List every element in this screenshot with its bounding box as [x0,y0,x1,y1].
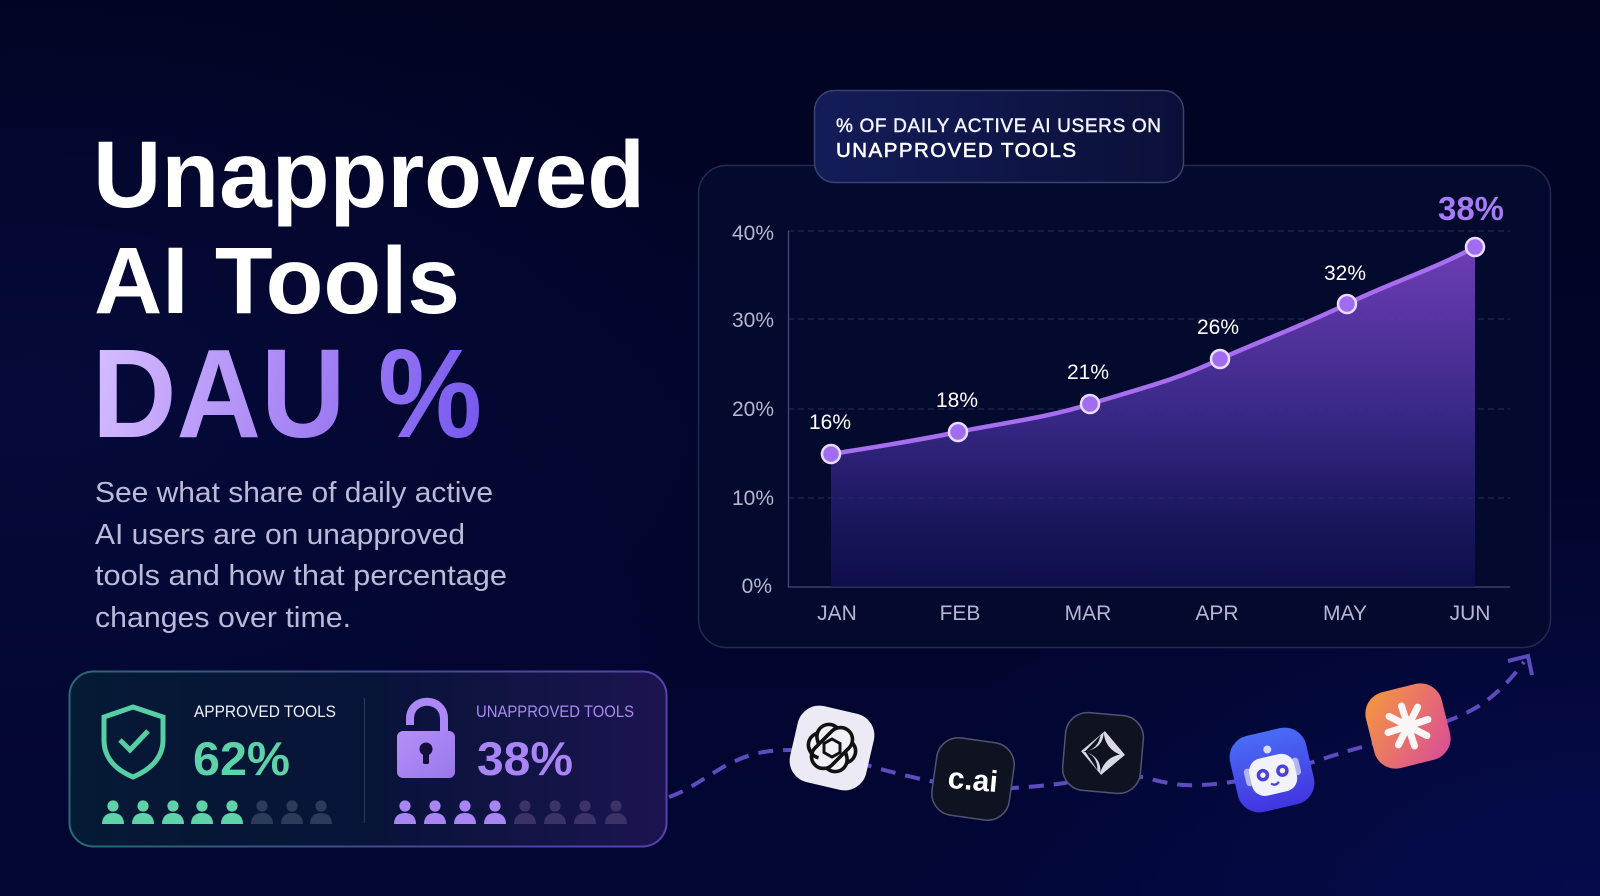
y axis labels: 30% [732,309,774,332]
unapproved value: 38% [477,732,573,785]
dashed growth path [669,656,1532,797]
unapproved label: UNAPPROVED TOOLS [476,703,634,721]
x axis labels: MAR [1065,602,1111,625]
divider [364,698,366,823]
description text [95,477,507,634]
description text: See what share of daily active [95,477,493,509]
unapproved people row [394,800,627,824]
chart panel frame [698,166,1550,648]
data labels: 32% [1324,262,1366,285]
title: DAU % [92,323,482,464]
data labels: 38% [1438,190,1504,227]
approved value: 62% [193,732,290,785]
data labels: 18% [936,389,978,412]
trend line [831,247,1475,454]
icon: ChatGPT tile [785,701,879,795]
data labels [809,190,1504,434]
description text: AI users are on unapproved [95,519,465,551]
approved label: APPROVED TOOLS [194,703,336,721]
icon: c.ai tile [929,735,1017,823]
y axis labels: 40% [732,222,774,245]
card frame [70,672,666,846]
x axis labels: JAN [817,602,857,625]
description text: tools and how that percentage [95,560,507,592]
y axis labels: 10% [732,487,774,510]
data points [822,238,1484,463]
icon: star tile [1061,711,1145,795]
chart title pill: % OF DAILY ACTIVE AI USERS ON [836,116,1161,137]
x axis labels: MAY [1323,602,1367,625]
grid lines and axes [788,231,1510,587]
icon: asterisk tile [1361,679,1455,773]
icon: robot tile [1225,723,1319,817]
y axis labels [732,222,774,598]
chart title pill: UNAPPROVED TOOLS [836,139,1076,162]
panel: approved vs unapproved card [70,672,666,846]
area under line [831,247,1475,587]
x axis labels [817,602,1490,625]
panel: line chart [698,166,1550,648]
icon: shield [104,707,163,777]
x axis labels: JUN [1450,602,1490,625]
title: Unapproved [93,122,645,228]
title [92,122,645,464]
chart title pill [814,90,1184,182]
y axis labels: 0% [742,575,772,598]
x axis labels: APR [1195,602,1239,625]
data labels: 16% [809,411,851,434]
icon: c.ai tile: c.ai [947,762,999,799]
y axis labels: 20% [732,398,774,421]
data labels: 21% [1067,361,1109,384]
data labels: 26% [1197,316,1239,339]
approved people row [102,800,332,824]
description text: changes over time. [95,602,351,634]
icon: open lock [397,702,455,778]
title: AI Tools [94,228,460,334]
x axis labels: FEB [940,602,980,625]
